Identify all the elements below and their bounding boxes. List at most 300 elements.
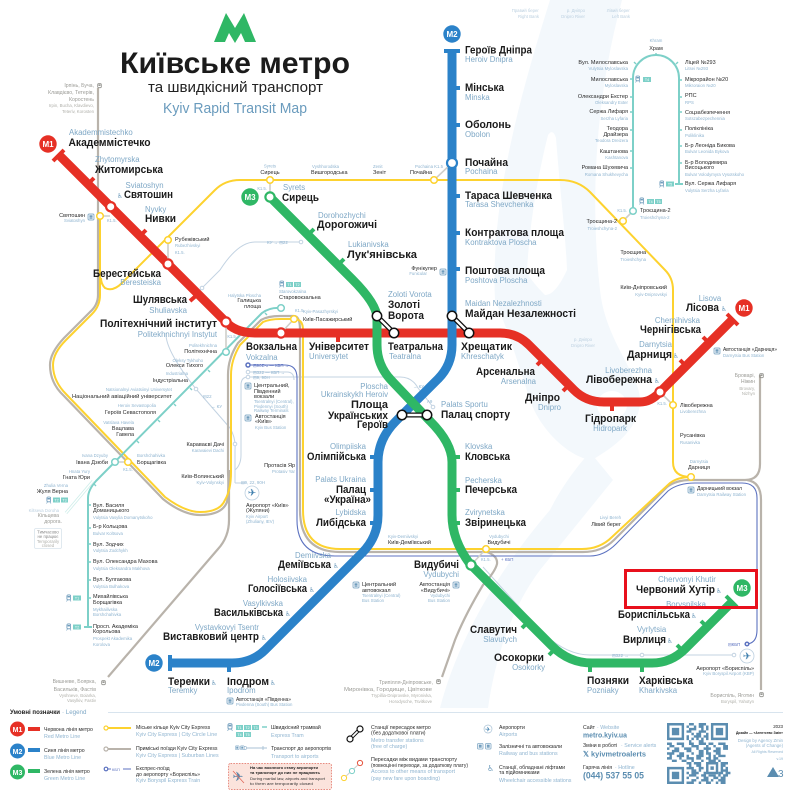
legend: metro lines: M3 bbox=[13, 770, 22, 777]
tram stops: Borshchahivka line: Starovokzalna bbox=[279, 289, 307, 294]
legend: airports, terminals, accessibility: Wheelchair accessible stations bbox=[499, 778, 572, 784]
M2 station labels: Obolon bbox=[465, 130, 490, 139]
tram stops: Borshchahivka line: Politekhnichna bbox=[189, 343, 218, 348]
M2 station labels: Demiivska bbox=[295, 551, 332, 560]
tram stops: Borshchahivka line: Борщагівка bbox=[93, 600, 123, 606]
M3 station labels: Позняки bbox=[587, 675, 629, 687]
suburban grey lines bbox=[50, 88, 761, 690]
airport transport route labels: КУ → ⊟22 bbox=[267, 240, 288, 245]
M3 station labels: Kharkivska bbox=[639, 686, 678, 695]
terminals and airports: Kyiv Airport bbox=[246, 514, 269, 519]
tram route badges and icons: T4 bbox=[648, 200, 653, 204]
M2 station labels: Голосіївська bbox=[248, 583, 308, 595]
city express station labels: Syrets bbox=[264, 164, 276, 168]
city express station labels: Троєщина bbox=[620, 250, 647, 256]
M2 station labels: Виставковий центр bbox=[163, 631, 259, 643]
M1 station labels: Darnytsia bbox=[639, 340, 673, 349]
tram lines bbox=[66, 53, 683, 627]
airport transport route labels: ⊟9, 22, 90Н bbox=[241, 480, 265, 485]
M1 station labels: Вокзальна bbox=[246, 341, 298, 353]
legend: tram and airport transport: Express Tram bbox=[271, 733, 304, 739]
legend: metro lines: Синя лінія метро bbox=[44, 748, 85, 754]
M1 station labels: Лісова bbox=[686, 302, 720, 314]
terminals and airports: «Видубичі» bbox=[421, 588, 450, 594]
transfer: Maidan – Khreschatyk bbox=[447, 311, 474, 338]
M3 station labels: Vydubychi bbox=[423, 570, 459, 579]
terminals and airports: вокзали bbox=[254, 394, 274, 400]
city express station labels: Русанівка bbox=[680, 433, 706, 439]
river bank labels: Лівий берег bbox=[607, 8, 630, 13]
M2 station labels: ♿ bbox=[270, 679, 276, 687]
line badge M1 top left bbox=[39, 135, 57, 153]
tram stops: Borshchahivka line: Олекси Тихого bbox=[166, 363, 203, 369]
suburban destination labels: Клавдієво, Тетерів, bbox=[48, 90, 94, 96]
suburban destination labels: Ірпінь, Буча, bbox=[64, 83, 94, 89]
legend: tram and airport transport: T4 bbox=[237, 733, 242, 737]
M1 station labels: Arsenalna bbox=[501, 377, 537, 386]
tram stops: Borshchahivka line: Жуля Верна bbox=[37, 489, 69, 495]
terminals and airports: (Жуляни) bbox=[246, 508, 270, 514]
city express station labels: Vyshhorodska bbox=[312, 164, 340, 169]
M1 station labels: ♿ bbox=[673, 352, 679, 360]
tram stops: Troieshchyna line: Litsei №293 bbox=[685, 66, 709, 71]
M1 station labels: Дніпро bbox=[525, 392, 560, 404]
legend: credits bbox=[736, 724, 784, 780]
legend: contacts: (044) 537 55 05 bbox=[583, 770, 645, 782]
terminals and airports: Vydubychi bbox=[430, 593, 450, 598]
M3 station labels: Печерська bbox=[465, 484, 518, 496]
M3 station labels: Chervonyi Khutir bbox=[658, 575, 716, 584]
tram route badges and icons bbox=[47, 76, 674, 630]
tram stops: Borshchahivka line: Prospekt Akademika bbox=[93, 636, 133, 641]
tram stops: Troieshchyna line: Олександри Екстер bbox=[578, 94, 628, 100]
city express station labels: Kyiv-Demiivskyi bbox=[388, 534, 418, 539]
city express station labels: Livyi Bereh bbox=[600, 515, 622, 520]
M1 station labels: Akademmistechko bbox=[69, 128, 133, 137]
legend: martial law notice: На час воєнного стану аеропорти bbox=[250, 765, 319, 770]
M1 station labels: Хрещатик bbox=[461, 341, 512, 353]
legend: transfers: (без додаткової плати) bbox=[371, 730, 426, 736]
legend: contacts bbox=[583, 724, 657, 782]
M1 station labels: Житомирська bbox=[94, 164, 164, 176]
tram route badges and icons: T2 bbox=[54, 498, 59, 502]
suburban destination labels: Horodysche, Tsvitkove bbox=[389, 699, 433, 704]
M1 station labels: Politekhnichnyi Instytut bbox=[138, 330, 218, 339]
tram stops: Troieshchyna line: Соцзабезпечення bbox=[685, 110, 730, 116]
city express station labels: К1.5. bbox=[175, 250, 185, 255]
M3 station labels: Boryspilska bbox=[666, 600, 707, 609]
legend: tram and airport transport: T3 bbox=[253, 726, 258, 730]
M2 station labels: Minska bbox=[465, 93, 490, 102]
tram stops: Troieshchyna line: Драйзера bbox=[603, 131, 629, 138]
M1 station labels: Шулявська bbox=[133, 294, 188, 306]
M1 station labels: Hidropark bbox=[593, 424, 627, 433]
tram stops: Troieshchyna line: Romana Shukhevycha bbox=[585, 172, 629, 177]
tram stops: Troieshchyna line: Каштанова bbox=[600, 149, 629, 155]
line badge M1 right: M1 bbox=[738, 304, 750, 313]
line badge M1 right bbox=[735, 299, 753, 317]
terminals and airports: Автостанція bbox=[419, 582, 450, 588]
tram stops: Troieshchyna line: Myloslavska bbox=[605, 83, 629, 88]
city express station labels: Троєщина-2 bbox=[586, 219, 617, 225]
terminals and airports: Автостанція bbox=[255, 414, 286, 420]
tram route badges and icons: T1 bbox=[75, 596, 79, 600]
M3 station labels bbox=[282, 183, 722, 695]
terminals and airports: Центральний bbox=[362, 581, 396, 588]
tram stops: Borshchahivka line: Михайлівська bbox=[93, 593, 129, 600]
M3 station labels: Dorohozhychi bbox=[318, 211, 366, 220]
green metro line M3 bbox=[270, 197, 737, 672]
M1 station labels: Nyvky bbox=[145, 205, 166, 214]
legend: credits: 2023 bbox=[773, 724, 784, 729]
M2 station labels bbox=[163, 44, 576, 695]
legend: credits: Design by Agency Zmin bbox=[738, 738, 784, 743]
terminals and airports: «Київ» bbox=[255, 419, 272, 425]
M3 station labels: Золоті bbox=[388, 299, 420, 311]
terminals and airports: Автостанція «Дарниця» bbox=[723, 347, 777, 353]
M2 station labels: ♿ bbox=[285, 610, 291, 618]
tram route badges and icons: T2 bbox=[75, 626, 79, 630]
M3 station labels: Сирець bbox=[282, 192, 319, 204]
legend: credits: Дизайн — «Агентство Змін» bbox=[736, 730, 784, 735]
terminals and airports: Kyiv Bus Station bbox=[255, 425, 287, 430]
express train to Boryspil airport bbox=[248, 365, 757, 644]
M1 station labels: Арсенальна bbox=[476, 366, 536, 378]
M1 station labels: Beresteiska bbox=[120, 278, 162, 287]
M1 station labels: ♿ bbox=[117, 192, 123, 200]
tram stops: Borshchahivka line: Просп. Академіка bbox=[93, 624, 139, 630]
M2 station labels: Деміївська bbox=[278, 559, 332, 571]
tram stops: Troieshchyna line: Вул. Сержа Лифаря bbox=[685, 181, 736, 187]
tram stops: Borshchahivka line: Vulytsia Vasylia Domanytskoho bbox=[93, 515, 153, 520]
M2 station labels: Ukrainskykh Heroiv bbox=[321, 390, 388, 399]
M3 station labels: Palats Sportu bbox=[441, 400, 488, 409]
river bank labels bbox=[512, 8, 631, 348]
city express station labels: Kyiv-Volynskyi bbox=[197, 480, 224, 485]
tram stops: Troieshchyna line: РПС bbox=[685, 93, 697, 99]
M3 station labels: Лук'янівська bbox=[347, 249, 418, 261]
M3 station labels: Klovska bbox=[465, 442, 493, 451]
tram stops: Troieshchyna line: Б-р Володимира bbox=[685, 160, 728, 166]
tram stops: Borshchahivka line: Вул. Олександра Махова bbox=[93, 559, 158, 565]
suburban destination labels: Броварі, bbox=[735, 373, 755, 379]
M2 station labels: Майдан Незалежності bbox=[465, 308, 576, 320]
airport transport route labels: ⊟90Е-х — КБП → bbox=[253, 363, 289, 368]
terminals and airports: (Zhuliany, IEV) bbox=[246, 519, 275, 524]
city express station labels: Pochaina K1.5 bbox=[415, 164, 444, 169]
legend: tram and airport transport: T5 bbox=[245, 733, 250, 737]
legend: metro lines: Green Metro Line bbox=[44, 776, 85, 782]
logo: Kyiv metro M bbox=[214, 13, 256, 43]
tram stops: Borshchahivka line: Borshchahivka bbox=[93, 612, 122, 617]
legend: metro lines: Червона лінія метро bbox=[44, 727, 93, 733]
legend: transfers bbox=[341, 725, 468, 782]
city express station labels: Vydubychi bbox=[489, 534, 509, 539]
legend: airports, terminals, accessibility: ♿ bbox=[487, 764, 494, 773]
M2 station labels: Площа bbox=[351, 399, 389, 411]
M1 station labels: Святошин bbox=[124, 189, 173, 201]
suburban destination labels: Ніжин bbox=[741, 379, 755, 385]
terminals and airports: Bus Station bbox=[428, 598, 451, 603]
M2 station labels: Kontraktova Ploscha bbox=[465, 238, 537, 247]
M2 station labels: Ipodrom bbox=[227, 686, 256, 695]
legend: airports, terminals, accessibility: Railway and bus stations bbox=[499, 751, 558, 757]
title: Київське метро bbox=[120, 47, 350, 80]
legend: tram and airport transport: Транспорт до аеропортів bbox=[271, 746, 331, 752]
tram stops: Troieshchyna line: Khram bbox=[650, 38, 663, 43]
tram stops: Borshchahivka line: Bulvar Koltsova bbox=[93, 531, 123, 536]
river bank labels: Dnipro River bbox=[571, 343, 596, 348]
tram stops: Borshchahivka line: площа bbox=[244, 304, 262, 310]
legend: transfers: Пересадки між видами транспорту bbox=[371, 757, 457, 763]
transfer: Zoloti Vorota – Teatralna bbox=[372, 311, 399, 338]
legend: city express: Kyiv City Express | Suburban Lines bbox=[136, 753, 219, 759]
airport transport route labels: ⊟322 — КБП → bbox=[253, 370, 285, 375]
tram stops: Troieshchyna line: RPS bbox=[685, 100, 694, 105]
terminals and airports: Darnytsia Bus Station bbox=[723, 353, 765, 358]
M2 station labels: Контрактова площа bbox=[465, 227, 565, 239]
M3 station labels: Zoloti Vorota bbox=[388, 290, 432, 299]
line badge M3 bottom bbox=[733, 579, 751, 597]
terminals and airports: Pivdennyi (South) bbox=[254, 404, 288, 409]
city express station labels: Kyiv-Pasazhyrskyi bbox=[303, 309, 338, 314]
river bank labels: Right Bank bbox=[518, 14, 540, 19]
city express station labels: Київ-Пасажирський bbox=[303, 316, 352, 323]
suburban destination labels: Vyshneve, Boiarka, bbox=[59, 693, 96, 698]
legend: contacts: · Hotline bbox=[615, 765, 635, 771]
legend header: Умовні позначки bbox=[10, 709, 60, 716]
M2 station labels: Почайна bbox=[465, 157, 509, 169]
airport transport route labels: ⊟9, 90Н bbox=[253, 375, 270, 380]
legend: tram and airport transport: T1 bbox=[237, 726, 242, 730]
city express station labels: К1.5. bbox=[657, 401, 667, 406]
tram stops: Borshchahivka line: Zhulia Verna bbox=[44, 483, 69, 488]
M1 station labels: Лівобережна bbox=[586, 374, 653, 386]
city express and tram station rings bbox=[97, 177, 749, 657]
M2 station labels: Оболонь bbox=[465, 119, 511, 131]
tram stops: Borshchahivka line: Кільцева bbox=[38, 513, 59, 519]
M2 station labels: Tarasa Shevchenka bbox=[465, 200, 534, 209]
city express station labels: Протасів Яр bbox=[264, 463, 295, 469]
M3 station labels: Vyrlytsia bbox=[637, 625, 667, 634]
tram stops: Borshchahivka line: Oleksy Tykhoho bbox=[172, 358, 204, 363]
legend: city express bbox=[104, 725, 219, 784]
tram stops: Troieshchyna line: Vulytsia Serzha Lyfaria bbox=[685, 188, 729, 193]
legend: city express: Експрес-поїзд bbox=[136, 766, 170, 772]
M1 station labels: Дарниця bbox=[627, 349, 672, 361]
tram stops: Borshchahivka line: Hnata Yury bbox=[69, 469, 91, 474]
tram stops: Troieshchyna line: Sotszabezpechennia bbox=[685, 116, 726, 121]
suburban destination labels: Вишневе, Боярка, bbox=[53, 679, 96, 685]
tram stops: Borshchahivka line: Vulytsia Zodchykh bbox=[93, 548, 128, 553]
city express station labels: К1.5. bbox=[227, 334, 237, 339]
terminals and airports: Bus Station bbox=[362, 598, 385, 603]
tram route badges and icons: T1 bbox=[287, 283, 292, 287]
suburban destination labels: Brovary, bbox=[739, 386, 755, 391]
interchange links between modes bbox=[100, 163, 673, 565]
tram stops: Troieshchyna line: Poliklinika bbox=[685, 133, 705, 138]
tram stops: Borshchahivka line: Героїв Севастополя bbox=[105, 410, 156, 416]
city express station labels: К1.5. bbox=[123, 467, 133, 472]
legend: airports, terminals, accessibility bbox=[477, 725, 572, 784]
M2 station labels: Іподром bbox=[227, 676, 269, 688]
tram stops: Borshchahivka line: Івана Дзюби bbox=[76, 460, 108, 466]
tram route badges and icons: T4 bbox=[645, 78, 649, 82]
tram stops: Borshchahivka line bbox=[29, 289, 322, 647]
suburban destination labels: Васильків, Фастів bbox=[54, 687, 96, 693]
legend: metro lines: M2 bbox=[13, 749, 22, 756]
legend: transfers: (free of charge) bbox=[371, 744, 407, 750]
legend: airports, terminals, accessibility: Станції, обладнані ліфтами bbox=[499, 765, 565, 771]
legend: airports, terminals, accessibility: Залізничні та автовокзали bbox=[499, 744, 562, 750]
tram stops: Borshchahivka line: Industrialna bbox=[166, 371, 189, 376]
terminals and airports: Південний bbox=[254, 388, 281, 395]
city express station labels bbox=[59, 164, 714, 562]
M3 station labels: Ворота bbox=[388, 310, 425, 322]
line badge M3 bottom: M3 bbox=[736, 584, 748, 593]
yellow city circle line bbox=[53, 180, 691, 549]
river bank labels: Dnipro River bbox=[561, 14, 586, 19]
M2 station labels: Palats Ukraina bbox=[315, 475, 367, 484]
line badge M3 top: M3 bbox=[244, 193, 256, 202]
legend: tram and airport transport: Transport to airports bbox=[271, 754, 319, 760]
city express station labels: Караваєві Дачі bbox=[186, 442, 224, 448]
legend: metro lines bbox=[10, 722, 93, 782]
legend: martial law notice: ✈ bbox=[233, 770, 244, 785]
city express station labels: К1.5. bbox=[107, 218, 117, 223]
M3 station labels: Харківська bbox=[639, 675, 694, 687]
M3 station labels: Бориспільська bbox=[618, 609, 691, 621]
blue metro line M2 bbox=[170, 51, 460, 672]
metro stations with rings bbox=[106, 158, 665, 570]
tram stops: Borshchahivka line: Політехнічна bbox=[184, 349, 218, 355]
tram stops: Borshchahivka line: Вул. Зодчих bbox=[93, 542, 124, 548]
terminals and airports: Аеропорт «Київ» bbox=[246, 503, 289, 509]
river Dnipro background bbox=[440, 0, 640, 708]
M3 station labels: Pecherska bbox=[465, 476, 503, 485]
M2 station labels: Палац bbox=[336, 484, 366, 496]
M3 station labels: Pozniaky bbox=[587, 686, 619, 695]
legend: tram and airport transport bbox=[228, 724, 331, 760]
terminals and airports: Фунікулер bbox=[411, 266, 437, 272]
legend: transfers: (повноцінні переходи, за додаткову плату) bbox=[371, 763, 468, 769]
M2 station labels: Maidan Nezalezhnosti bbox=[465, 299, 542, 308]
legend: credits: 3 bbox=[778, 769, 784, 780]
M2 station labels: Poshtova Ploscha bbox=[465, 276, 528, 285]
M1 station labels: Берестейська bbox=[93, 268, 162, 280]
M2 station labels: Olimpiiska bbox=[330, 442, 367, 451]
legend: city express: Приміські поїзди Kyiv City Express bbox=[136, 746, 218, 752]
M2 station labels: Vasylkivska bbox=[243, 599, 284, 608]
terminals and airports: Tsentralnyi (Central) bbox=[362, 593, 401, 598]
tram stops: Borshchahivka line: Вул. Василя bbox=[93, 503, 124, 509]
M1 station labels: Чернігівська bbox=[640, 324, 702, 336]
tram stops: Troieshchyna line: Troieshchyna-2 bbox=[640, 215, 670, 220]
legend: transfers: Metro transfer stations bbox=[371, 738, 424, 744]
closed-tram note box: closed bbox=[42, 543, 55, 548]
M3 station labels: Видубичі bbox=[414, 559, 459, 571]
M1 station labels: Khreschatyk bbox=[461, 352, 504, 361]
legend: city express: Kyiv Boryspil Express Train bbox=[136, 778, 200, 784]
city express station labels: Troieshchyna-2 bbox=[588, 226, 618, 231]
tram stops: Troieshchyna line: Милославська bbox=[591, 77, 629, 83]
tram stops: Borshchahivka line: Б-р Кольцова bbox=[93, 524, 128, 530]
tram stops: Troieshchyna line: Теодора bbox=[607, 126, 629, 132]
city express station labels: Karavaievi Dachi bbox=[192, 448, 224, 453]
tram stops: Troieshchyna line: Висоцького bbox=[685, 165, 714, 171]
legend: credits: v.19 bbox=[776, 757, 783, 761]
legend: airports, terminals, accessibility: Аеропорти bbox=[499, 725, 525, 731]
M1 station labels: Гідропарк bbox=[585, 413, 636, 425]
tram stops: Borshchahivka line: Національний авіаційний університет bbox=[72, 393, 173, 400]
M3 station labels: ♿ bbox=[716, 587, 722, 595]
tram stops: Troieshchyna line: Троєщина-2 bbox=[640, 208, 671, 214]
city express station labels: К1.5. bbox=[481, 557, 491, 562]
M2 station labels: Героїв Дніпра bbox=[465, 44, 533, 56]
legend: metro lines: Зелена лінія метро bbox=[44, 769, 90, 775]
legend: martial law notice bbox=[228, 764, 332, 790]
tram stops: Borshchahivka line: Borshchahivka bbox=[137, 453, 166, 458]
tram stops: Borshchahivka line: Вул. Булгакова bbox=[93, 577, 132, 583]
terminals and airports: автовокзал bbox=[362, 588, 391, 594]
legend: contacts: · Website bbox=[597, 725, 619, 731]
terminals and airports: ✈ bbox=[248, 488, 256, 499]
tram stops: Borshchahivka line: Старовокзальна bbox=[279, 295, 322, 301]
legend: metro lines: M1 bbox=[13, 727, 22, 734]
city express station labels: К1.5. bbox=[617, 208, 627, 213]
legend: airports, terminals, accessibility: Airports bbox=[499, 732, 518, 738]
tram stops: Borshchahivka line: Вацлава bbox=[112, 426, 135, 432]
city express station labels: Рубежівський bbox=[175, 236, 210, 243]
river bank labels: р. Дніпро bbox=[574, 337, 593, 342]
terminals and airports: Аеропорт «Бориспіль» bbox=[696, 666, 754, 672]
legend: contacts: Зміни в роботі bbox=[583, 743, 617, 749]
suburban destination labels: Teteriv, Korosten bbox=[62, 109, 95, 114]
M2 station labels: «Україна» bbox=[324, 494, 371, 506]
tram route badges and icons: T5 bbox=[668, 182, 672, 186]
M2 station labels: ♿ bbox=[309, 586, 315, 594]
M2 station labels: Pochaina bbox=[465, 167, 498, 176]
tram stops: Borshchahivka line: Ivana Dzyuby bbox=[82, 453, 109, 458]
red metro line M1 bbox=[53, 150, 738, 411]
airport transport route labels: ⊟КБП bbox=[728, 642, 740, 647]
suburban destination labels: Vasylkiv, Fastiv bbox=[67, 698, 97, 703]
airport transport route labels: А9 bbox=[427, 399, 433, 404]
M2 station labels: Heroiv Dnipra bbox=[465, 55, 513, 64]
highlight box around Chervonyi Khutir bbox=[626, 570, 756, 608]
tram stops: Borshchahivka line: Індустріальна bbox=[153, 378, 189, 384]
river bank labels: Правий берег bbox=[512, 8, 539, 13]
tram stops: Borshchahivka line: Kiltseva Doroha bbox=[29, 508, 60, 513]
legend: contacts: metro.kyiv.ua bbox=[583, 730, 628, 740]
M2 station labels: ♿ bbox=[261, 634, 267, 642]
M3 station labels: Lukianivska bbox=[348, 240, 389, 249]
airport transport route labels: + КБП bbox=[501, 557, 513, 562]
M1 station labels: Chernihivska bbox=[655, 316, 701, 325]
legend: credits: All Rights Reserved bbox=[751, 750, 783, 754]
tram stops: Troieshchyna line: Вул. Милославська bbox=[578, 60, 629, 66]
closed-tram note box: Тимчасово bbox=[37, 530, 59, 534]
terminals and airports: Автостанція «Південна» bbox=[236, 697, 291, 703]
tram route badges and icons: T2 bbox=[295, 283, 300, 287]
legend header: · Legend bbox=[62, 709, 87, 716]
legend: metro lines: Blue Metro Line bbox=[44, 755, 81, 761]
legend: martial law notice: During martial law, airports and transport bbox=[250, 776, 326, 781]
M2 station labels: Teremky bbox=[168, 686, 198, 695]
terminals and airports: Darnytsia Railway Station bbox=[697, 492, 747, 497]
M1 station labels: Sviatoshyn bbox=[126, 181, 164, 190]
legend: tram and airport transport: T2 bbox=[245, 726, 250, 730]
